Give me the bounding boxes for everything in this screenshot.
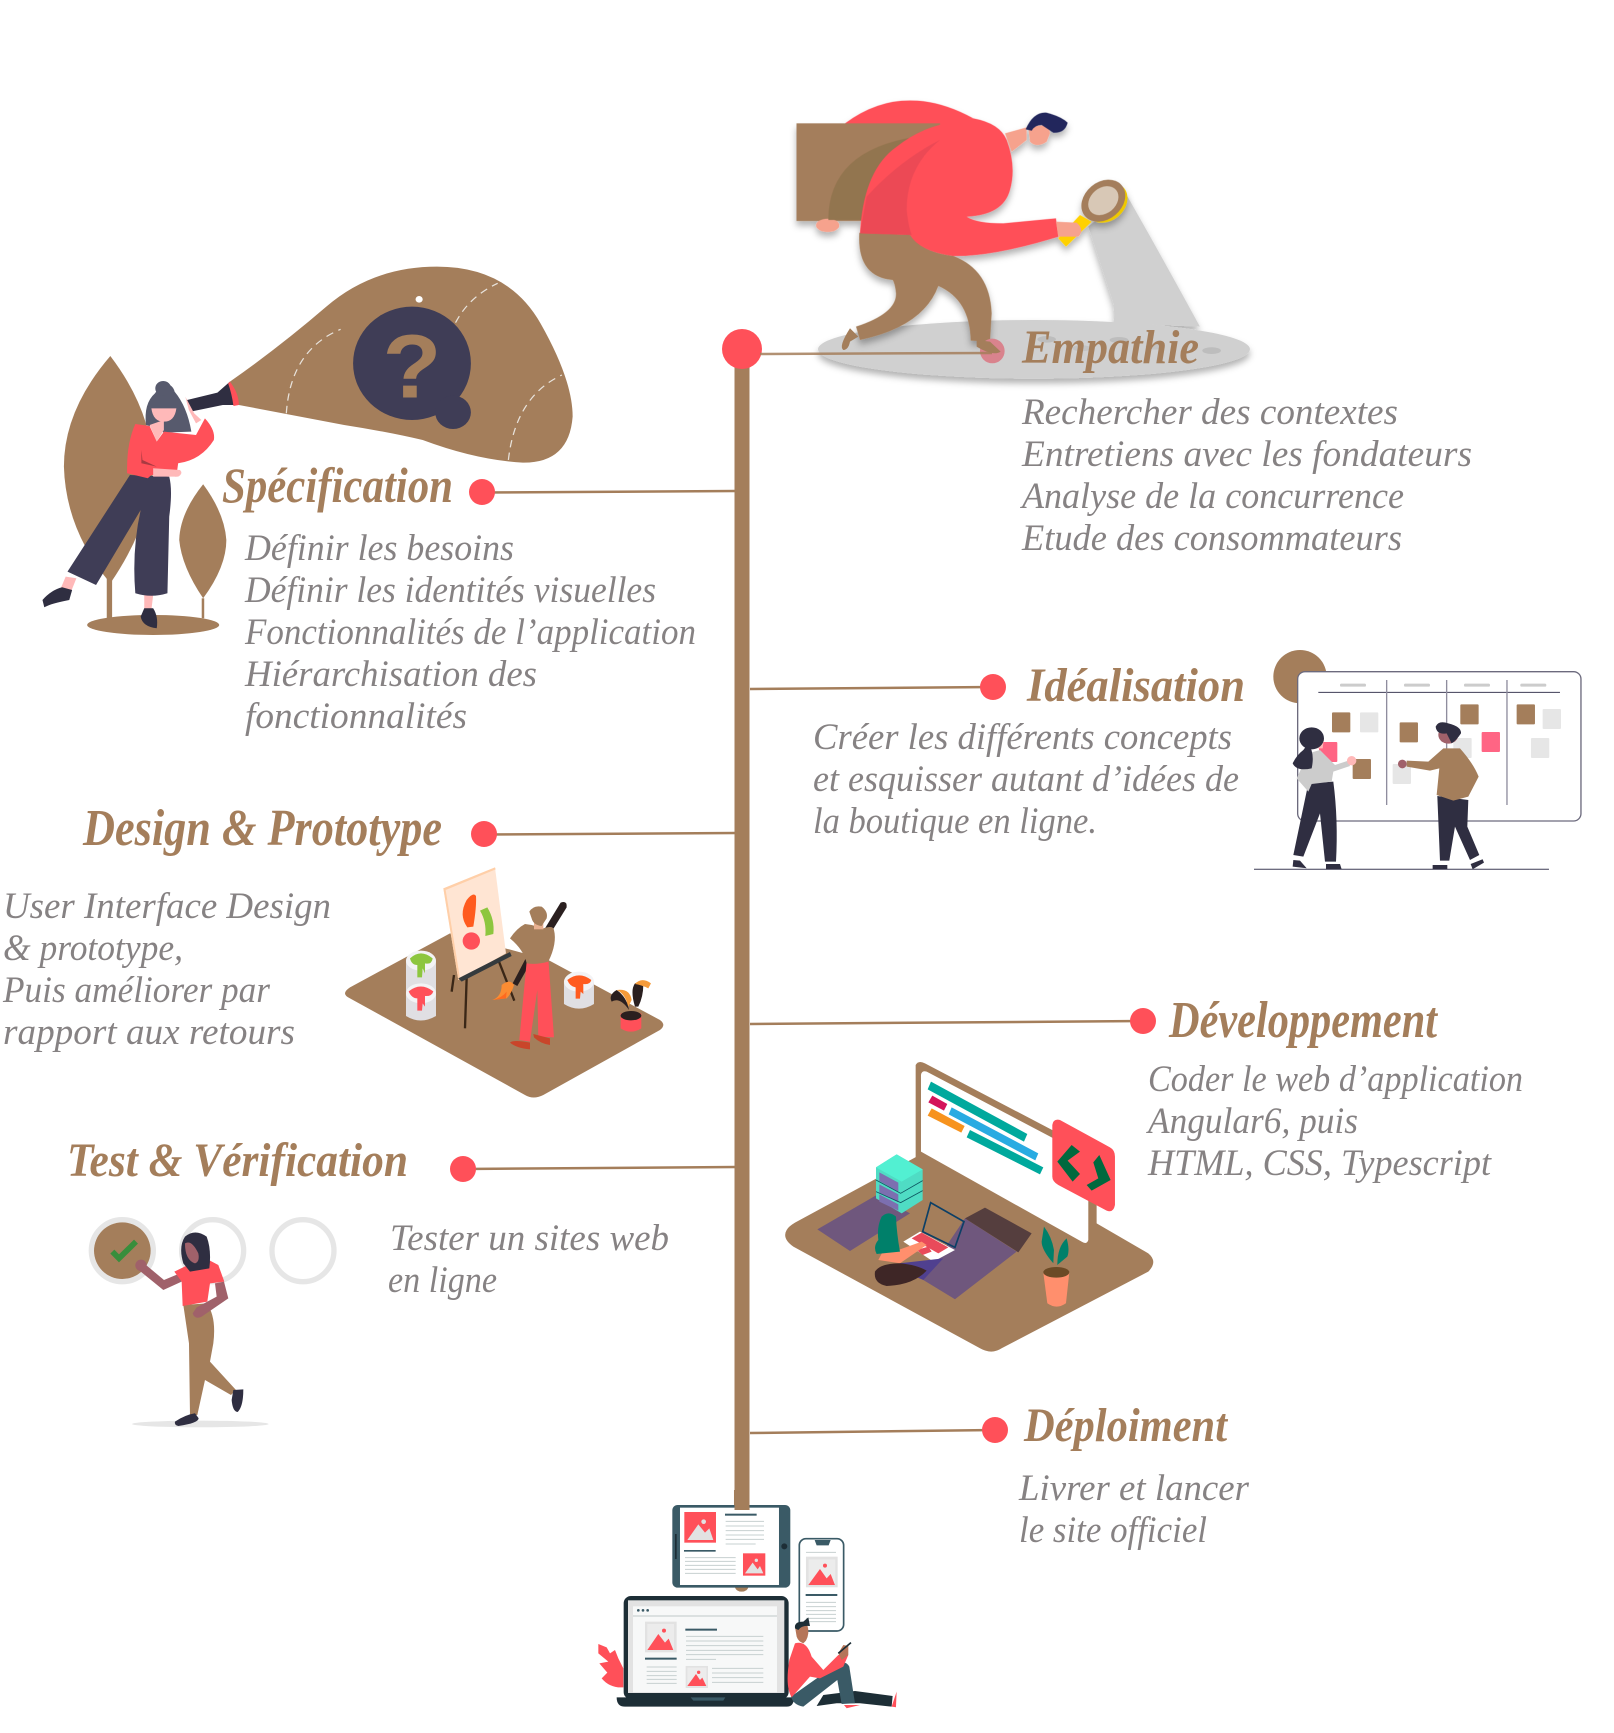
panel: design text: & prototype, — [3, 928, 183, 969]
panel: design text: rapport aux retours — [3, 1012, 295, 1053]
panel: design text: User Interface Design — [3, 886, 331, 927]
panel: idealisation text: et esquisser autant d’idées de — [813, 759, 1239, 800]
panel: specification text: Définir les identités visuelles — [244, 570, 656, 611]
panel: idealisation text: Idéalisation — [1026, 659, 1245, 712]
illustration: empathie detective with magnifier — [797, 100, 1250, 379]
timeline trunk — [722, 329, 762, 1510]
panel: test text: Tester un sites web — [390, 1218, 669, 1259]
panel: empathie text — [1019, 321, 1472, 559]
panel: deploiement text: le site officiel — [1019, 1510, 1207, 1551]
panel: deploiement text: Livrer et lancer — [1018, 1468, 1250, 1509]
panel: specification text — [222, 457, 696, 737]
connector: design — [471, 821, 736, 847]
panel: developpement text: Coder le web d’application — [1148, 1059, 1523, 1100]
panel: empathie text: Rechercher des contextes — [1021, 392, 1398, 433]
panel: developpement text: Angular6, puis — [1145, 1101, 1358, 1142]
panel: empathie text: Analyse de la concurrence — [1019, 476, 1404, 517]
illustration: design painter on isometric plate — [345, 867, 663, 1097]
panel: specification text: Fonctionnalités de l’application — [244, 612, 696, 653]
panel: developpement text: HTML, CSS, Typescript — [1147, 1143, 1493, 1184]
panel: test text: en ligne — [388, 1260, 497, 1301]
panel: specification text: Hiérarchisation des — [244, 654, 537, 695]
illustration: specification flashlight woman — [42, 267, 573, 635]
panel: idealisation text: Créer les différents concepts — [813, 717, 1232, 758]
connector: test — [450, 1156, 736, 1182]
illustration: specification flashlight woman: ? — [383, 316, 441, 417]
panel: deploiement text — [1018, 1399, 1250, 1551]
panel: deploiement text: Déploiment — [1023, 1399, 1228, 1452]
panel: specification text: fonctionnalités — [245, 696, 467, 737]
connector: idealisation — [750, 674, 1006, 700]
panel: design text: Design & Prototype — [82, 800, 442, 857]
connector: deploiement — [750, 1417, 1008, 1443]
illustration: deploiement devices and sitting man — [598, 1490, 897, 1708]
connector: empathie — [760, 353, 992, 354]
panel: idealisation text — [813, 659, 1245, 842]
panel: developpement text: Développement — [1168, 992, 1438, 1049]
connector: specification — [469, 479, 736, 505]
panel: empathie text: Etude des consommateurs — [1021, 518, 1402, 559]
panel: empathie text: Empathie — [1021, 321, 1199, 374]
panel: specification text: Spécification — [222, 457, 453, 513]
panel: developpement text — [1145, 992, 1523, 1184]
panel: test text: Test & Vérification — [67, 1134, 408, 1187]
panel: design text: Puis améliorer par — [2, 970, 271, 1011]
panel: idealisation text: la boutique en ligne. — [813, 801, 1097, 842]
panel: design text — [2, 800, 442, 1053]
illustration: developpement isometric workspace — [785, 1062, 1153, 1352]
panel: empathie text: Entretiens avec les fondateurs — [1021, 434, 1472, 475]
panel: specification text: Définir les besoins — [244, 528, 514, 569]
illustration: test checklist woman — [91, 1220, 334, 1427]
connector: developpement — [750, 1008, 1156, 1034]
illustration: idealisation kanban board — [1254, 650, 1581, 869]
panel: test text — [67, 1134, 669, 1301]
